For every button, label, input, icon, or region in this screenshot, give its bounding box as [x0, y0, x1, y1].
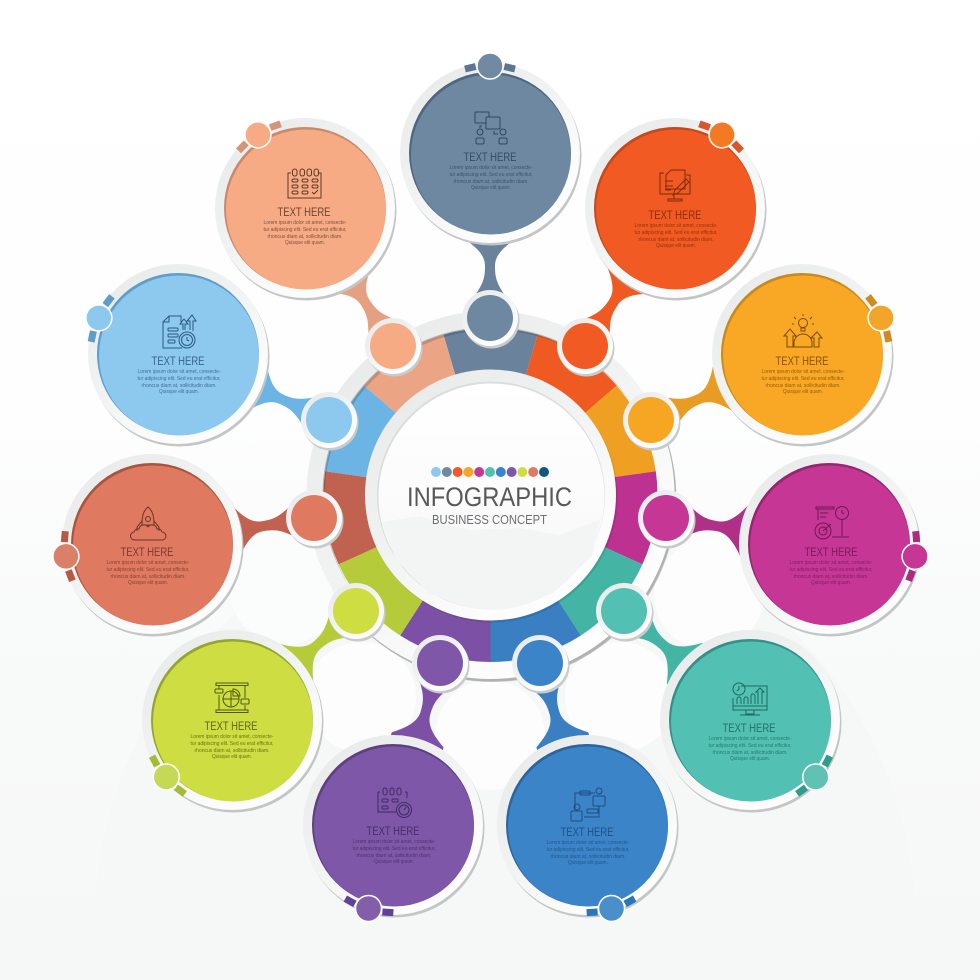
body text: rhoncus diam at, sollicitudin diam.	[454, 179, 528, 185]
heading: TEXT HERE	[648, 208, 702, 222]
body text: Quisque elit quam.	[783, 389, 823, 395]
body text: Lorem ipsum dolor sit amet, consecte-	[138, 369, 221, 375]
heading: TEXT HERE	[776, 354, 828, 368]
body text	[790, 560, 873, 586]
body text: Quisque elit quam.	[730, 756, 770, 762]
segment: magenta	[490, 471, 658, 564]
body text: Quisque elit quam.	[811, 580, 851, 586]
marker dot and ticks	[76, 289, 121, 347]
colour dots	[431, 467, 549, 477]
body text: tur adipiscing elit. Sed eu erat efficitur,	[106, 567, 190, 573]
marker dot and ticks	[859, 289, 904, 347]
connector: blue	[521, 679, 592, 759]
body text	[762, 369, 845, 395]
body text	[708, 736, 792, 762]
body text: Lorem ipsum dolor sit amet, consecte-	[790, 560, 873, 566]
body text: Lorem ipsum dolor sit amet, consecte-	[762, 369, 845, 375]
node: lime	[328, 583, 386, 642]
body text: Quisque elit quam.	[568, 860, 608, 866]
body text: tur adipiscing elit. Sed eu erat efficitur,	[450, 172, 532, 178]
connector: lime	[269, 607, 356, 692]
body text: tur adipiscing elit. Sed eu erat efficitur,	[264, 227, 346, 233]
marker dot and ticks	[464, 53, 516, 79]
node: magenta	[638, 490, 696, 548]
icon: report with arrows and clock	[163, 315, 196, 348]
marker dot and ticks	[49, 529, 82, 584]
body text: Lorem ipsum dolor sit amet, consecte-	[190, 734, 274, 740]
connector: magenta	[685, 495, 761, 559]
body text	[634, 223, 718, 249]
marker dot and ticks	[693, 110, 751, 160]
node: teal	[596, 583, 654, 642]
segment: sky blue	[325, 386, 490, 495]
ring nodes	[286, 290, 696, 694]
body text: Lorem ipsum dolor sit amet, consecte-	[634, 223, 718, 229]
segment: slate	[444, 328, 538, 495]
connector: teal	[624, 606, 711, 692]
body text	[450, 165, 533, 191]
body text: rhoncus diam at, sollicitudin diam.	[550, 854, 626, 860]
node: blue	[512, 635, 570, 694]
body text: rhoncus diam at, sollicitudin diam.	[110, 574, 186, 580]
node: orange	[557, 318, 614, 376]
marker dot and ticks	[340, 889, 397, 928]
body text: tur adipiscing elit. Sed eu erat efficitur,	[790, 567, 872, 573]
marker dot and ticks	[229, 110, 287, 160]
segment: terracotta	[323, 471, 490, 564]
panel: magenta circle	[739, 454, 932, 636]
body text: rhoncus diam at, sollicitudin diam.	[638, 237, 714, 243]
panel: teal circle	[660, 630, 842, 812]
marker dot and ticks	[899, 529, 932, 584]
node: amber	[623, 392, 680, 450]
heading: TEXT HERE	[464, 150, 516, 164]
heading: TEXT HERE	[120, 545, 174, 559]
icon: calendar	[288, 169, 321, 198]
panel: peach circle	[215, 110, 396, 301]
body text: tur adipiscing elit. Sed eu erat efficitur,	[190, 741, 274, 747]
icon: presentation pie chart	[215, 683, 249, 712]
node: peach	[365, 318, 422, 376]
node: terracotta	[286, 490, 344, 548]
body text: rhoncus diam at, sollicitudin diam.	[142, 383, 216, 389]
body text: rhoncus diam at, sollicitudin diam.	[356, 853, 432, 859]
body text: Quisque elit quam.	[128, 580, 168, 586]
icon: rocket launch	[130, 507, 166, 540]
icon: document with pen	[660, 170, 690, 201]
connector: slate	[463, 226, 517, 294]
centre circle	[365, 370, 618, 622]
node: purple	[412, 635, 470, 694]
body text: Quisque elit quam.	[656, 243, 696, 249]
icon: flow chart people	[475, 112, 507, 144]
body text	[190, 734, 274, 760]
marker dot and ticks	[140, 749, 193, 805]
connectors from ring nodes to circles	[219, 226, 761, 759]
body text: tur adipiscing elit. Sed eu erat efficitur,	[138, 376, 220, 382]
body text	[546, 840, 630, 866]
body text: rhoncus diam at, sollicitudin diam.	[766, 383, 840, 389]
subtitle: BUSINESS CONCEPT	[432, 512, 547, 527]
title: INFOGRAPHIC	[407, 482, 572, 512]
body text: Quisque elit quam.	[159, 389, 199, 395]
body text: Quisque elit quam.	[212, 754, 252, 760]
heading: TEXT HERE	[560, 825, 614, 839]
connector: amber	[662, 358, 746, 435]
panel: orange circle	[585, 110, 766, 301]
segment: amber	[490, 386, 656, 495]
body text: tur adipiscing elit. Sed eu erat efficitur,	[634, 230, 718, 236]
body text: Lorem ipsum dolor sit amet, consecte-	[708, 736, 792, 742]
body text: Lorem ipsum dolor sit amet, consecte-	[264, 220, 347, 226]
panel: lime circle	[140, 630, 324, 812]
node: slate	[462, 290, 520, 348]
body text: tur adipiscing elit. Sed eu erat efficitur,	[708, 743, 792, 749]
segment: orange	[490, 335, 617, 495]
body text: rhoncus diam at, sollicitudin diam.	[194, 748, 270, 754]
panel: terracotta circle	[49, 454, 243, 636]
body text: Quisque elit quam.	[374, 859, 414, 865]
segment: blue	[490, 495, 581, 662]
heading: TEXT HERE	[804, 545, 858, 559]
segment: peach	[364, 335, 490, 495]
body text	[352, 839, 436, 865]
panel: amber circle	[712, 264, 904, 446]
body text	[138, 369, 221, 395]
segment: teal	[490, 495, 642, 636]
marker dot and ticks	[789, 749, 842, 805]
icon: target and clock	[815, 506, 849, 539]
heading: TEXT HERE	[152, 354, 204, 368]
body text: Lorem ipsum dolor sit amet, consecte-	[352, 839, 436, 845]
marker dot and ticks	[583, 889, 640, 928]
body text: rhoncus diam at, sollicitudin diam.	[794, 574, 868, 580]
panel: sky blue circle	[76, 264, 270, 446]
ring band with coloured segments	[314, 319, 668, 674]
body text	[264, 220, 347, 246]
body text: tur adipiscing elit. Sed eu erat efficitur,	[352, 846, 436, 852]
body text: Quisque elit quam.	[471, 185, 511, 191]
segment: purple	[400, 495, 490, 662]
heading: TEXT HERE	[366, 824, 420, 838]
connector: sky blue	[234, 358, 318, 435]
heading: TEXT HERE	[204, 719, 258, 733]
connector: orange	[575, 254, 658, 341]
segment: lime	[339, 495, 490, 636]
icon: process boxes	[571, 788, 605, 821]
body text: rhoncus diam at, sollicitudin diam.	[268, 234, 342, 240]
body text: Lorem ipsum dolor sit amet, consecte-	[546, 840, 630, 846]
panel: slate circle	[400, 53, 582, 246]
heading: TEXT HERE	[722, 721, 776, 735]
panel: blue circle	[497, 735, 678, 928]
connector: purple	[388, 679, 459, 759]
node: sky blue	[301, 392, 358, 450]
heading: TEXT HERE	[278, 205, 330, 219]
body text: Lorem ipsum dolor sit amet, consecte-	[450, 165, 533, 171]
body text: tur adipiscing elit. Sed eu erat efficitur,	[762, 376, 844, 382]
panel: purple circle	[303, 735, 484, 928]
connector: peach	[321, 254, 403, 340]
body text	[106, 560, 190, 586]
body text: Lorem ipsum dolor sit amet, consecte-	[106, 560, 190, 566]
icon: monitor with chart	[733, 683, 767, 715]
body text: rhoncus diam at, sollicitudin diam.	[712, 750, 788, 756]
body text: tur adipiscing elit. Sed eu erat efficitur,	[546, 847, 630, 853]
icon: light bulb with arrows	[784, 314, 822, 347]
connector: terracotta	[219, 495, 295, 559]
icon: calendar with clock	[378, 788, 412, 818]
body text: Quisque elit quam.	[285, 240, 325, 246]
